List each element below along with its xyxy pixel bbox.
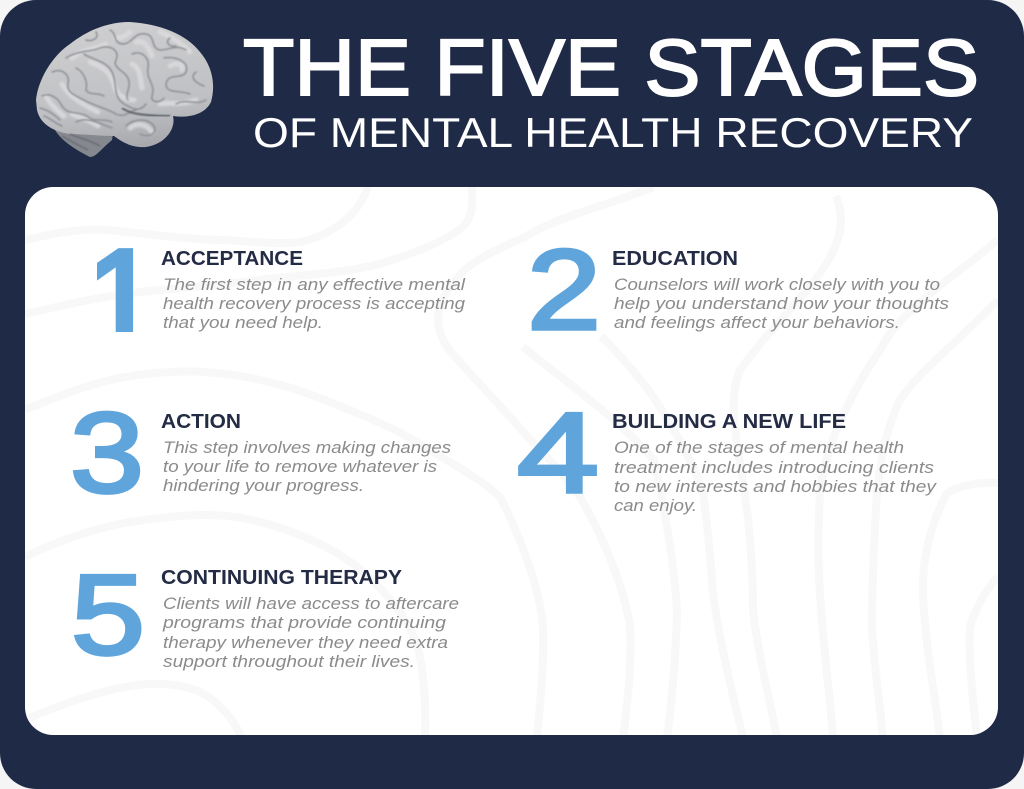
body text — [614, 275, 950, 332]
body text: hindering your progress. — [163, 476, 364, 495]
number 3: 3 — [70, 390, 144, 517]
body text: therapy whenever they need extra — [163, 633, 448, 652]
body text — [163, 275, 466, 332]
number 2: 2 — [527, 227, 601, 354]
body text: help you understand how your thoughts — [614, 294, 950, 313]
stage 2: education — [527, 227, 950, 354]
heading: CONTINUING THERAPY — [161, 567, 403, 589]
body text: Clients will have access to aftercare — [163, 594, 459, 613]
body text: The first step in any effective mental — [163, 275, 466, 294]
body text: and feelings affect your behaviors. — [614, 313, 900, 332]
panel: white content card — [25, 187, 998, 738]
stage 1: acceptance — [97, 248, 466, 332]
heading: BUILDING A NEW LIFE — [612, 411, 846, 433]
body text: One of the stages of mental health — [614, 438, 904, 457]
number 4: 4 — [517, 390, 599, 517]
title line 2: OF MENTAL HEALTH RECOVERY — [253, 109, 973, 156]
body text: This step involves making changes — [163, 438, 452, 457]
title line 1: THE FIVE STAGES — [243, 23, 979, 112]
stage 3: action — [70, 390, 452, 517]
title — [243, 23, 979, 156]
body text: to new interests and hobbies that they — [614, 477, 938, 496]
heading: EDUCATION — [612, 248, 738, 270]
stage 5: continuing therapy — [71, 552, 459, 679]
heading: ACTION — [161, 411, 241, 433]
body text — [614, 438, 938, 515]
number 1: 1 — [83, 220, 161, 377]
icon: brain — [36, 22, 213, 157]
body text — [162, 594, 459, 671]
body text — [163, 438, 452, 495]
stage 4: building a new life — [517, 390, 938, 517]
number 5: 5 — [71, 552, 145, 679]
body text: that you need help. — [163, 313, 323, 332]
body text: health recovery process is accepting — [163, 294, 466, 313]
heading: ACCEPTANCE — [161, 248, 303, 270]
body text: support throughout their lives. — [163, 652, 415, 671]
body text: can enjoy. — [614, 496, 697, 515]
body text: Counselors will work closely with you to — [614, 275, 940, 294]
body text: treatment includes introducing clients — [614, 458, 935, 477]
body text: to your life to remove whatever is — [163, 457, 438, 476]
body text: programs that provide continuing — [162, 613, 447, 632]
